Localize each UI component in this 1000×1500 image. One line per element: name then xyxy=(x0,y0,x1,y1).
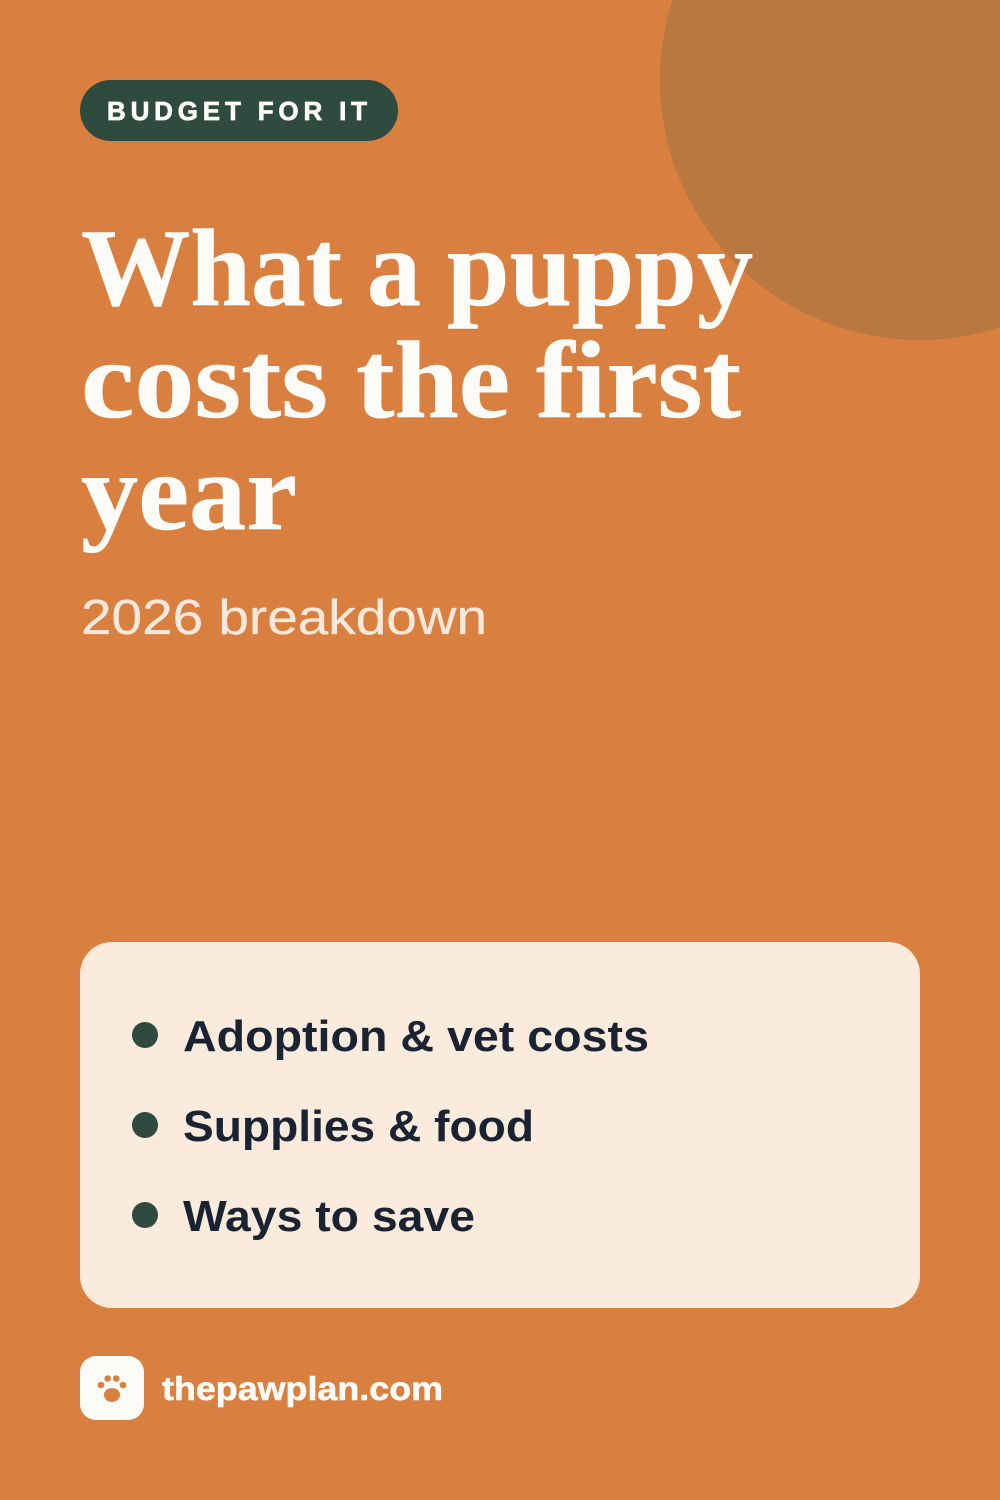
title: the xyxy=(356,319,510,441)
title xyxy=(81,207,753,553)
badge: BUDGET FOR IT xyxy=(107,96,367,126)
decorative circle xyxy=(660,0,1000,340)
item: adoption and vet costs: Adoption & vet costs xyxy=(183,1012,649,1061)
item: ways to save: Ways to save xyxy=(183,1192,475,1241)
item: supplies and food: Supplies & food xyxy=(183,1102,534,1151)
footer logo xyxy=(80,1356,144,1420)
panel: topics xyxy=(80,942,920,1308)
title: puppy xyxy=(447,207,753,329)
title: What xyxy=(81,207,342,329)
badge xyxy=(80,80,398,141)
title: a xyxy=(367,207,421,329)
icon: paw xyxy=(98,1375,126,1402)
website: thepawplan.com xyxy=(162,1370,443,1407)
title: first xyxy=(536,319,741,441)
title: costs xyxy=(81,319,328,441)
subtitle: 2026 breakdown xyxy=(81,591,487,645)
title: year xyxy=(81,431,297,553)
